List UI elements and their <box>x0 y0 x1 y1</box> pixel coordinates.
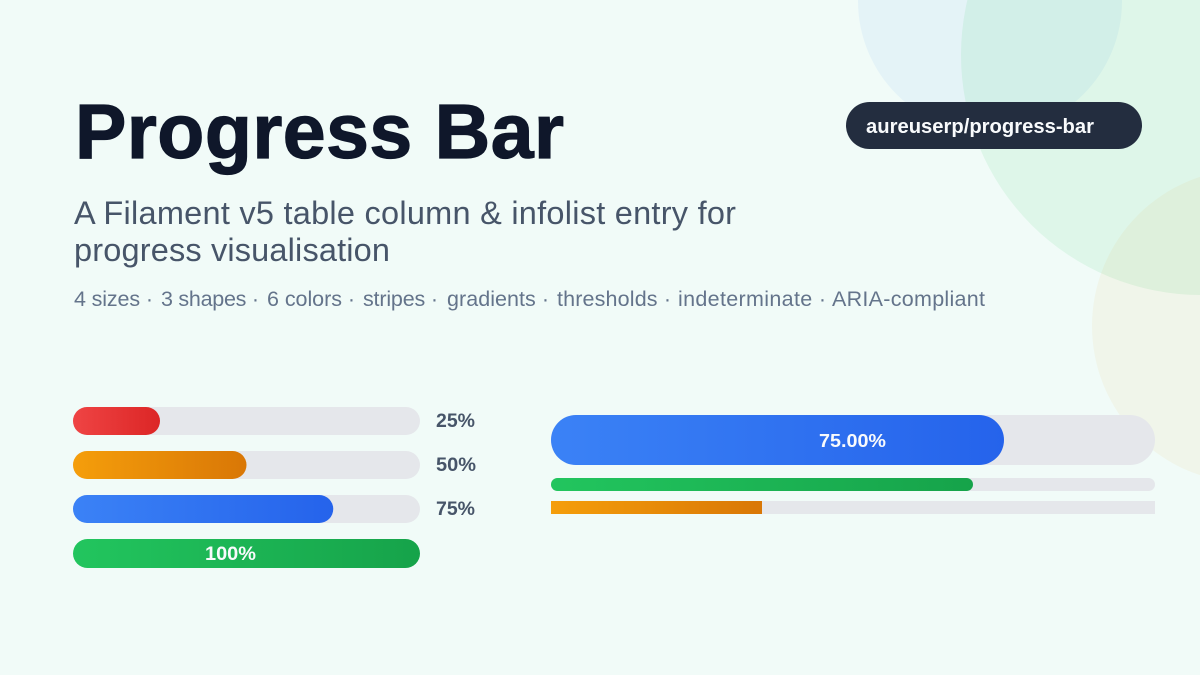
bar: 50% amber: 50% <box>436 455 476 476</box>
bar: 75% blue <box>73 495 475 523</box>
feature list <box>74 287 985 311</box>
background circles <box>858 0 1200 483</box>
large pill bar 75.00% <box>551 415 1155 465</box>
panel: size and shape bars <box>551 415 1155 514</box>
thin rounded green bar <box>551 478 1155 491</box>
bar: 25% red <box>73 407 475 435</box>
bar: 75% blue: 75% <box>436 499 475 520</box>
title: Progress Bar <box>75 89 564 175</box>
subtitle <box>74 195 736 268</box>
package name pill: aureuserp/progress-bar <box>866 116 1094 138</box>
bar: 50% amber <box>73 451 476 479</box>
feature list: stripes · <box>363 287 438 311</box>
feature list: 4 sizes · <box>74 287 153 311</box>
subtitle: A Filament v5 table column & infolist entry for <box>74 195 736 231</box>
feature list: 6 colors · <box>267 287 355 311</box>
subtitle: progress visualisation <box>74 232 390 268</box>
thin square amber bar <box>551 501 1155 514</box>
panel: stacked percentage bars <box>73 407 476 568</box>
package name pill <box>846 102 1142 149</box>
feature list: gradients · <box>447 287 549 311</box>
bar: 100% green <box>73 539 420 568</box>
large pill bar 75.00%: 75.00% <box>819 431 886 451</box>
feature list: ARIA-compliant <box>832 287 985 311</box>
bar: 25% red: 25% <box>436 411 475 432</box>
feature list: thresholds · <box>557 287 671 311</box>
feature list: 3 shapes · <box>161 287 259 311</box>
feature list: indeterminate · <box>678 287 826 311</box>
bar: 100% green: 100% <box>205 544 256 565</box>
